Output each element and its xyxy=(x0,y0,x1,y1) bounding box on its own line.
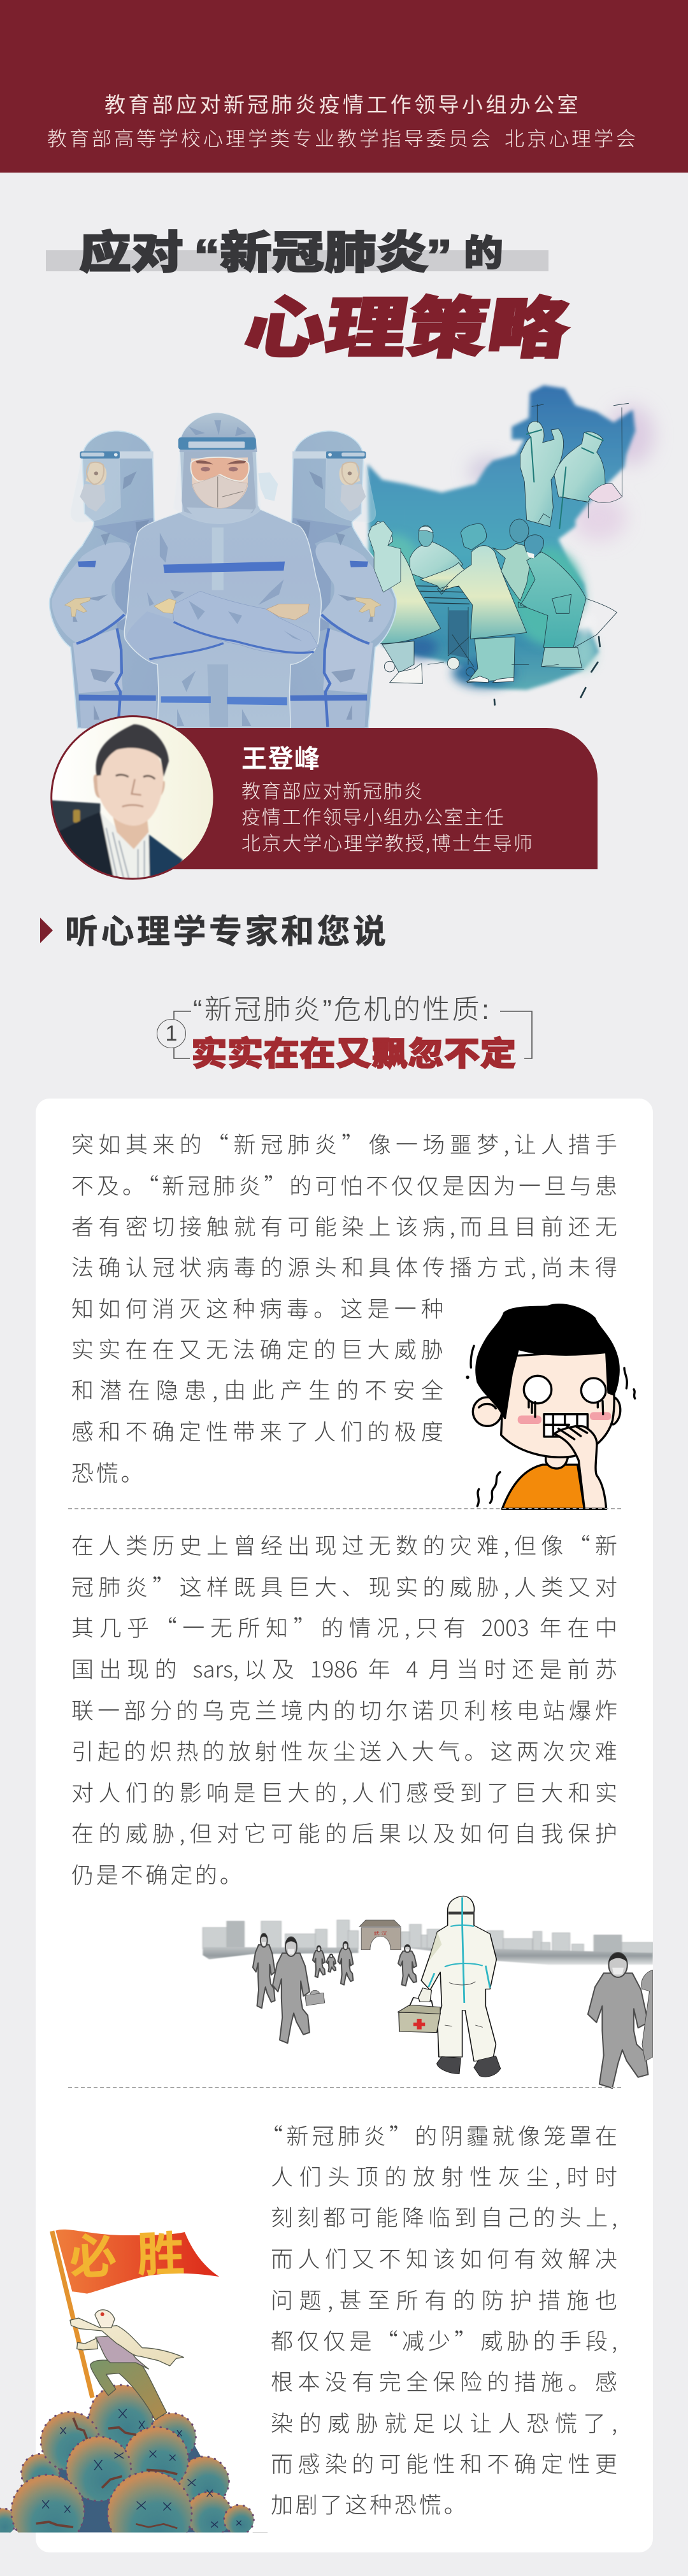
illustration: frightened cartoon boy xyxy=(466,1304,636,1510)
flag text: 必 xyxy=(66,2216,118,2289)
bottom ground shade xyxy=(253,2532,268,2533)
text block: paragraph 1: 实实在在又无法确定的巨大威胁 xyxy=(71,1332,443,1365)
icon: triangle marker xyxy=(40,918,53,943)
title line 2: 心理策略 xyxy=(239,274,577,371)
text block: paragraph 2: 冠肺炎”这样既具巨大、现实的威胁,人类又对 xyxy=(71,1570,617,1602)
text block: paragraph 3: 人们头顶的放射性灰尘,时时 xyxy=(271,2160,617,2192)
text block: paragraph 1 xyxy=(71,1127,617,1488)
divider 1 xyxy=(68,1508,621,1509)
title line 1: 的 xyxy=(464,233,503,273)
header line 1: 教育部应对新冠肺炎疫情工作领导小组办公室 xyxy=(104,88,581,118)
title line 1: “ xyxy=(194,231,220,280)
section heading xyxy=(40,905,389,953)
stretcher xyxy=(384,586,475,676)
text block: paragraph 2: 仍是不确定的。 xyxy=(71,1858,245,1890)
text block: paragraph 3: 加剧了这种恐慌。 xyxy=(271,2487,468,2520)
red cross on cap xyxy=(101,2312,104,2316)
map shape xyxy=(368,385,635,690)
text block: paragraph 3: “新冠肺炎”的阴霾就像笼罩在 xyxy=(261,2119,617,2151)
gate: 武汉 xyxy=(373,1930,387,1936)
speaker band xyxy=(127,728,598,869)
title line 1 xyxy=(79,228,503,280)
first-aid kit xyxy=(398,1988,440,2033)
text block: paragraph 1: 感和不确定性带来了人们的极度 xyxy=(71,1414,443,1447)
medic: left xyxy=(50,431,159,728)
text block: paragraph 3: 根本没有完全保险的措施。感 xyxy=(271,2365,617,2397)
text block: paragraph 2 xyxy=(71,1528,617,1890)
title line 1: 新冠肺炎 xyxy=(220,228,429,278)
text block: paragraph 3: 都仅仅是“减少”威胁的手段, xyxy=(271,2324,617,2356)
text block: paragraph 3: 而感染的可能性和不确定性更 xyxy=(271,2447,617,2479)
heading text: 听心理学专家和您说 xyxy=(65,905,389,953)
virus pile xyxy=(0,2384,255,2533)
subsection title xyxy=(157,995,533,1075)
small background nurse xyxy=(368,521,401,592)
title line 1: 应对 xyxy=(79,228,183,278)
title highlight bar xyxy=(46,250,548,271)
panel: article card xyxy=(36,1099,653,2552)
text block: paragraph 1: 法确认冠状病毒的源头和具体传播方式,尚未得 xyxy=(71,1250,617,1283)
speaker title line 1: 教育部应对新冠肺炎 xyxy=(241,776,424,804)
text block: paragraph 1: 突如其来的“新冠肺炎”像一场噩梦,让人措手 xyxy=(71,1127,617,1160)
flag text xyxy=(66,2215,186,2289)
text block: paragraph 3 xyxy=(261,2119,617,2520)
text block: paragraph 3: 问题,甚至所有的防护措施也 xyxy=(271,2283,617,2316)
divider 2 xyxy=(68,2087,621,2088)
header line 2: 教育部高等学校心理学类专业教学指导委员会 北京心理学会 xyxy=(47,123,638,152)
text block: paragraph 1: 者有密切接触就有可能染上该病,而且目前还无 xyxy=(71,1209,617,1242)
header band xyxy=(0,0,688,173)
speaker title line 2: 疫情工作领导小组办公室主任 xyxy=(241,802,505,830)
sleeves xyxy=(173,591,319,653)
speaker name: 王登峰 xyxy=(241,738,321,775)
face xyxy=(182,451,256,523)
subtitle: “新冠肺炎”危机的性质: xyxy=(193,995,491,1025)
number circle: 1 xyxy=(166,1021,177,1046)
text block: paragraph 1: 不及。“新冠肺炎”的可怕不仅仅是因为一旦与患 xyxy=(71,1169,617,1201)
speaker title line 3: 北京大学心理学教授,博士生导师 xyxy=(241,828,534,856)
text block: paragraph 3: 染的威胁就足以让人恐慌了, xyxy=(271,2406,617,2438)
text block: paragraph 1: 和潜在隐患,由此产生的不安全 xyxy=(71,1373,443,1405)
highlighted subtitle: 实实在在又飘忽不定 xyxy=(191,1027,516,1075)
illustration: medic with victory flag on defeated viruses xyxy=(0,2216,268,2533)
text block: paragraph 2: 在人类历史上曾经出现过无数的灾难,但像“新 xyxy=(71,1528,617,1561)
top medical staff xyxy=(520,403,629,529)
bracket frame xyxy=(173,1011,533,1059)
text block: paragraph 1: 知如何消灭这种病毒。这是一种 xyxy=(71,1292,443,1324)
text block: paragraph 3: 刻刻都可能降临到自己的头上, xyxy=(271,2200,617,2233)
gate xyxy=(359,1920,401,1950)
illustration: map of China with medical staff xyxy=(50,382,660,880)
flag-bearing medic xyxy=(70,2310,183,2420)
text block: paragraph 2: 对人们的影响是巨大的,人们感受到了巨大和实 xyxy=(71,1775,617,1808)
map halo xyxy=(469,406,654,541)
text block: paragraph 2: 其几乎“一无所知”的情况,只有 2003 年在中 xyxy=(71,1611,617,1643)
text block: paragraph 2: 国出现的 sars,以及 1986 年 4 月当时还是前苏 xyxy=(71,1652,617,1684)
flag text: 胜 xyxy=(136,2216,186,2286)
speaker portrait xyxy=(50,715,213,880)
medic: right xyxy=(287,431,396,728)
flag pole xyxy=(52,2231,92,2398)
number circle xyxy=(157,1019,186,1048)
text block: paragraph 1: 恐慌。 xyxy=(71,1456,145,1488)
medic: centre xyxy=(124,413,321,728)
title line 1: ” xyxy=(426,231,452,280)
virus faces xyxy=(43,2409,241,2527)
skyline xyxy=(203,1920,653,1965)
lower medical staff xyxy=(369,519,617,705)
title block xyxy=(46,228,577,371)
text block: paragraph 3: 而人们又不知该如何有效解决 xyxy=(271,2242,617,2274)
text block: paragraph 2: 联一部分的乌克兰境内的切尔诺贝利核电站爆炸 xyxy=(71,1693,617,1726)
illustration: medic and evacuating crowd in Wuhan xyxy=(201,1895,653,2089)
text block: paragraph 2: 在的威胁,但对它可能的后果以及如何自我保护 xyxy=(71,1816,617,1849)
text block: paragraph 2: 引起的炽热的放射性灰尘送入大气。这两次灾难 xyxy=(71,1734,617,1767)
flag xyxy=(55,2230,219,2294)
illustration: three medics in protective suits xyxy=(48,413,401,729)
map teal wash xyxy=(369,535,597,688)
medic from behind xyxy=(421,1896,501,2077)
evacuating crowd xyxy=(253,1933,653,2088)
